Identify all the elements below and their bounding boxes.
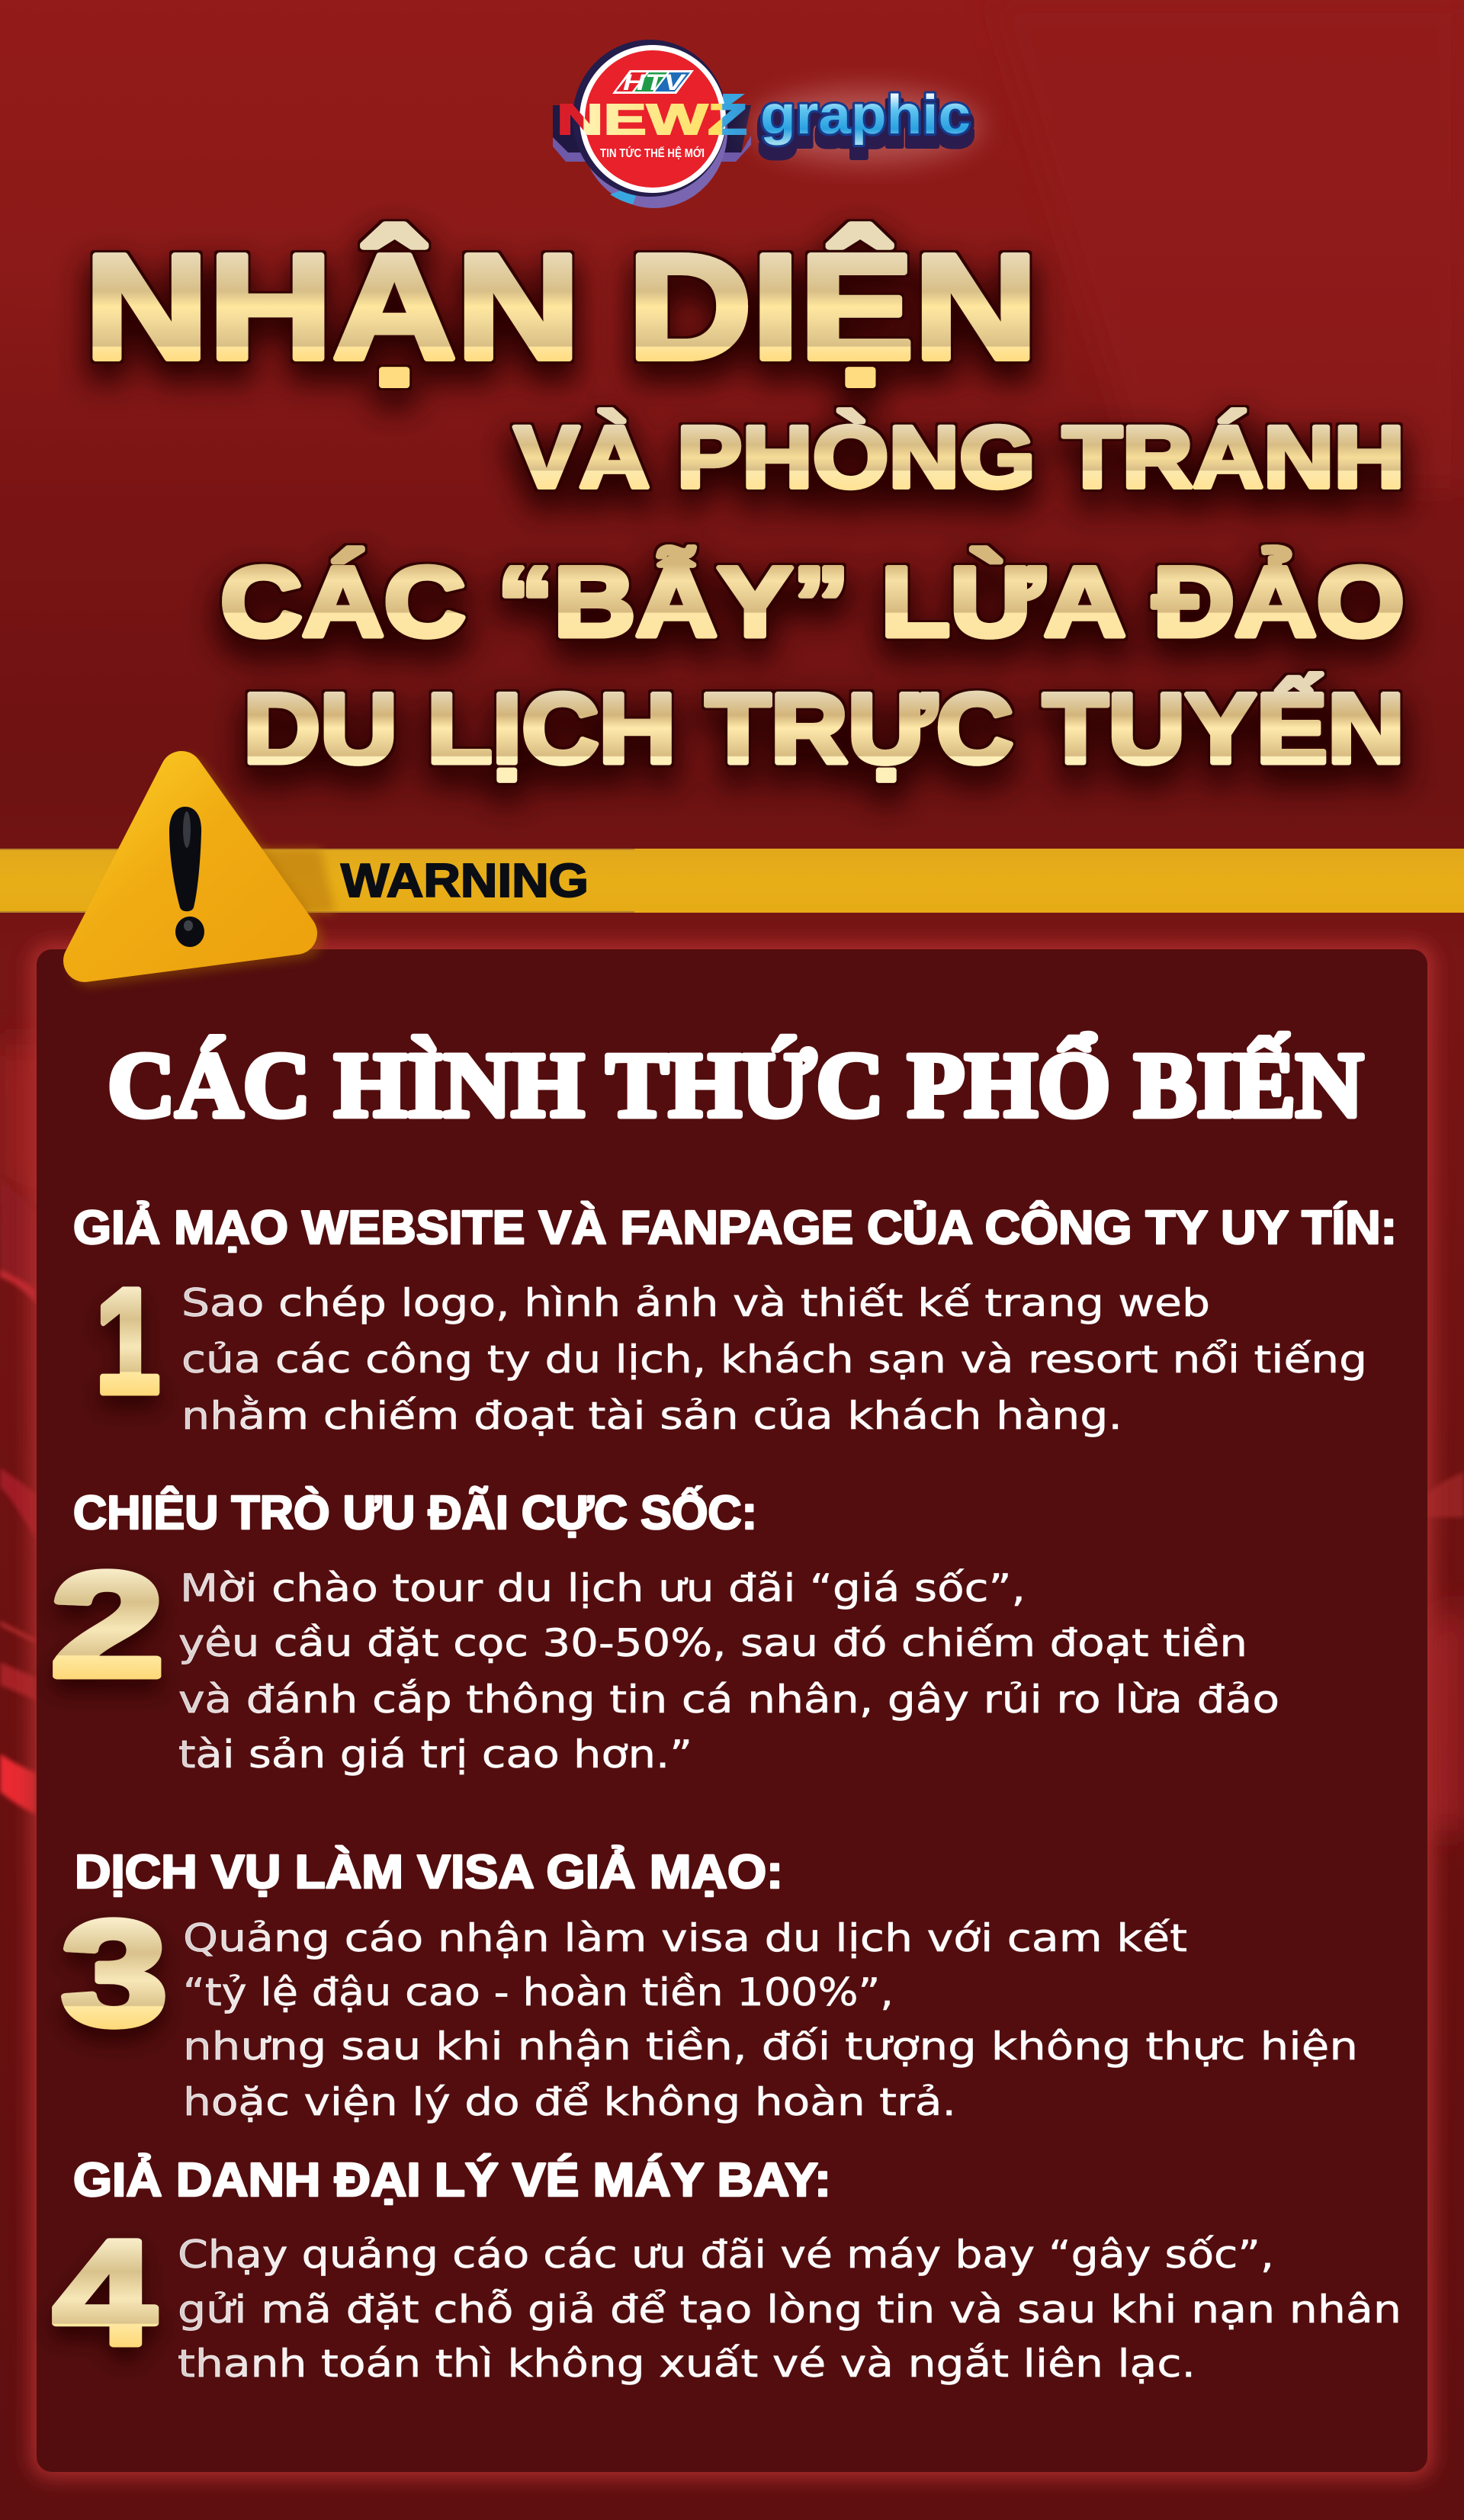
item 2 text: Mời chào tour du lịch ưu đãi “giá sốc”, [180, 1566, 1026, 1610]
title line 2: VÀ PHÒNG TRÁNH [514, 409, 1405, 506]
item 4 text: Chạy quảng cáo các ưu đãi vé máy bay “gây sốc”, [178, 2233, 1274, 2277]
item 2 heading: CHIÊU TRÒ ƯU ĐÃI CỰC SỐC: [73, 1487, 757, 1539]
number 2: 2 [50, 1542, 165, 1708]
panel glow [30, 943, 1434, 2478]
warning band [0, 849, 1464, 913]
item 3 heading: DỊCH VỤ LÀM VISA GIẢ MẠO: [75, 1846, 783, 1899]
item 4 text: gửi mã đặt chỗ giả để tạo lòng tin và sau khi nạn nhân [178, 2287, 1401, 2332]
item 4 [53, 2154, 1401, 2386]
item 3 text: nhưng sau khi nhận tiền, đối tượng không thực hiện [183, 2024, 1358, 2069]
item 2 text: và đánh cắp thông tin cá nhân, gây rủi ro lừa đảo [178, 1677, 1279, 1722]
warning label: WARNING [341, 855, 589, 907]
icon: warning triangle [85, 772, 302, 965]
logo emblem [553, 40, 751, 208]
logo: HTV Newz graphic [553, 40, 981, 208]
item 2 text: yêu cầu đặt cọc 30-50%, sau đó chiếm đoạt tiền [178, 1621, 1247, 1665]
item 3 text: hoặc viện lý do để không hoàn trả. [183, 2080, 956, 2124]
item 1 text [181, 1281, 1367, 1438]
panel: common forms [37, 949, 1427, 2472]
item 1 [73, 1202, 1397, 1438]
item 2 text: tài sản giá trị cao hơn.” [178, 1732, 692, 1777]
panel heading: CÁC HÌNH THỨC PHỔ BIẾN [108, 1032, 1363, 1137]
item 4 heading: GIẢ DANH ĐẠI LÝ VÉ MÁY BAY: [73, 2154, 831, 2207]
item 3 [61, 1846, 1358, 2124]
item 3 text [183, 1916, 1358, 2124]
item 3 text: “tỷ lệ đậu cao - hoàn tiền 100%”, [183, 1970, 894, 2014]
item 1 heading: GIẢ MẠO WEBSITE VÀ FANPAGE CỦA CÔNG TY UY TÍN: [73, 1202, 1397, 1254]
graphic wordmark [752, 85, 981, 162]
HTV badge: HTV [623, 70, 687, 95]
item 1 text: Sao chép logo, hình ảnh và thiết kế trang web [181, 1281, 1210, 1325]
item 2 text [178, 1566, 1279, 1777]
item 4 text: thanh toán thì không xuất vé và ngắt liên lạc. [178, 2342, 1196, 2386]
HTV badge [612, 70, 694, 95]
item 2 [50, 1487, 1279, 1777]
title line 4: DU LỊCH TRỰC TUYẾN [243, 673, 1405, 784]
title line 1: NHẬN DIỆN [85, 223, 1038, 390]
number 4: 4 [53, 2210, 156, 2376]
graphic wordmark: graphic [760, 85, 971, 146]
title line 3: CÁC “BẪY” LỪA ĐẢO [220, 546, 1405, 657]
item 3 text: Quảng cáo nhận làm visa du lịch với cam kết [183, 1916, 1187, 1960]
number 3: 3 [61, 1890, 168, 2056]
item 4 text [178, 2233, 1401, 2386]
item 1 text: nhằm chiếm đoạt tài sản của khách hàng. [181, 1394, 1122, 1438]
item 1 text: của các công ty du lịch, khách sạn và resort nổi tiếng [181, 1337, 1367, 1382]
number 1: 1 [95, 1258, 160, 1424]
title [85, 223, 1405, 784]
NEWZ wordmark: NEWZ [557, 95, 747, 144]
exclamation mark [169, 807, 204, 947]
tagline: TIN TỨC THẾ HỆ MỚI [600, 146, 705, 160]
